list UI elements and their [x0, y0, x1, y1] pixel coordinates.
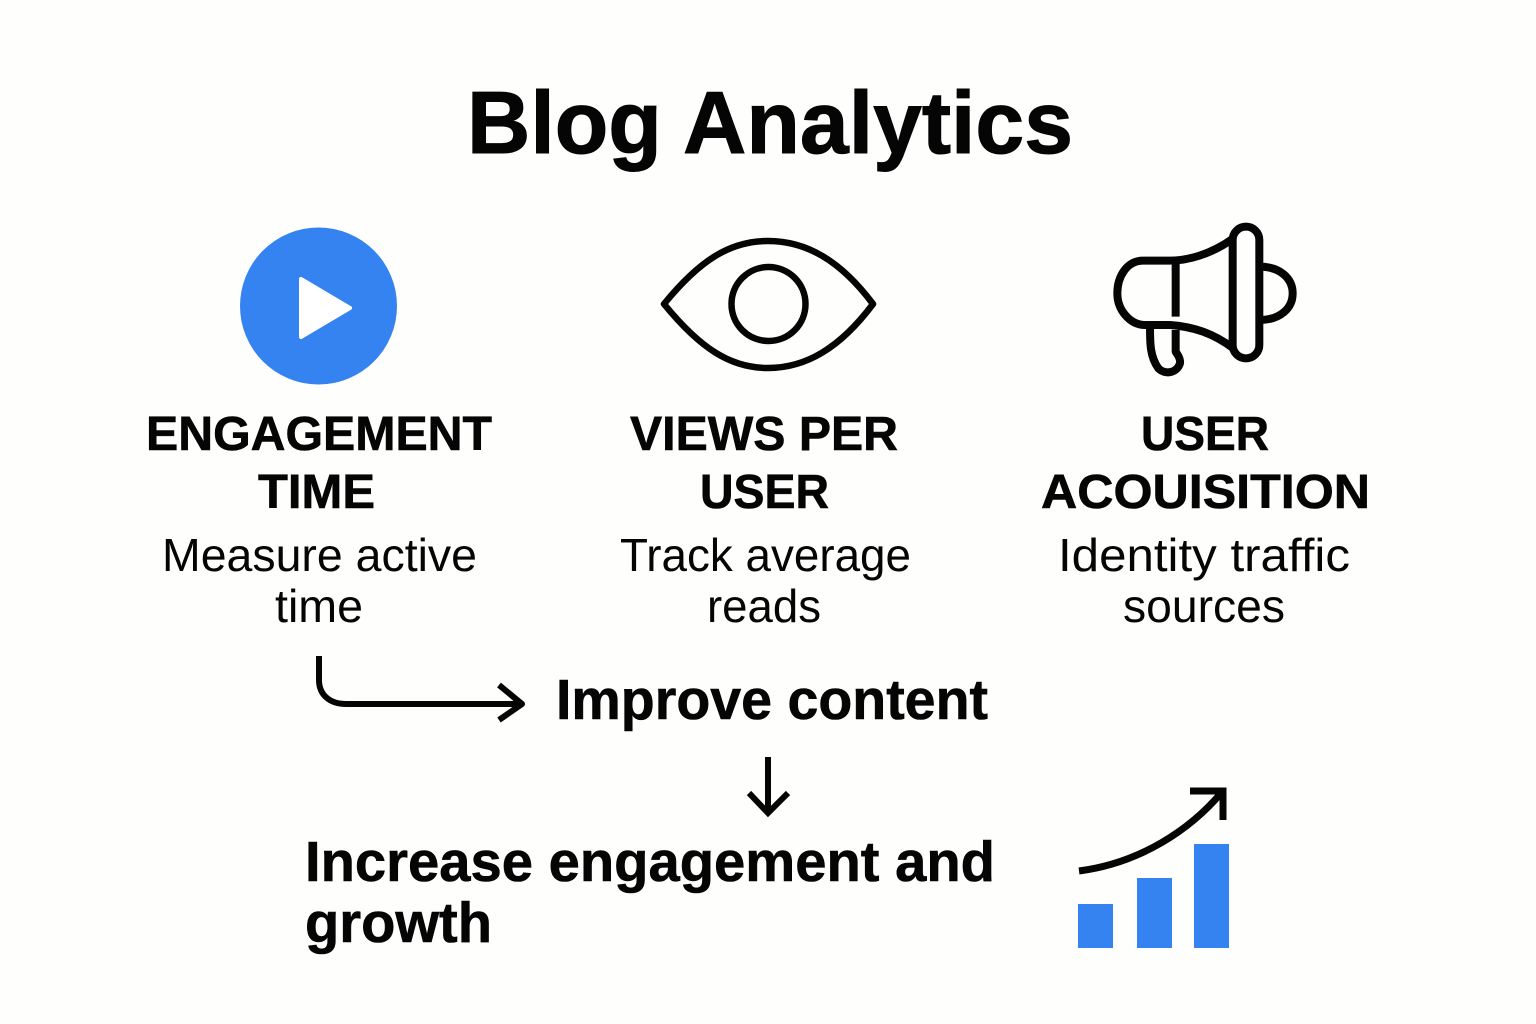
panel: user acquisition	[1041, 227, 1370, 632]
arrow: down	[749, 757, 788, 813]
heading: user acquisition	[1041, 408, 1370, 519]
icon: eye	[664, 241, 873, 368]
heading: engagement time: ENGAGEMENT	[146, 408, 492, 461]
title: Blog Analytics	[467, 73, 1073, 172]
heading: engagement time: TIME	[258, 466, 375, 519]
text: increase engagement and growth: Increase engagement and	[305, 830, 995, 894]
text: improve content: Improve content	[556, 668, 988, 732]
heading: user acquisition: ACOUISITION	[1041, 466, 1370, 519]
text: measure active time: Measure active	[162, 529, 477, 581]
chart: growth bars with arrow	[1078, 791, 1229, 948]
text: identity traffic sources: sources	[1123, 580, 1285, 632]
text: measure active time	[162, 529, 477, 632]
heading: views per user: VIEWS PER	[630, 408, 898, 461]
icon: play button	[240, 228, 397, 384]
arrow: engagement to improve content	[319, 656, 522, 720]
heading: views per user: USER	[700, 466, 829, 519]
heading: user acquisition: USER	[1141, 408, 1269, 461]
text: identity traffic sources	[1058, 529, 1350, 632]
text: increase engagement and growth	[305, 830, 995, 955]
heading: engagement time	[146, 408, 492, 519]
panel: views per user	[620, 241, 911, 632]
text: track average reads: Track average	[620, 529, 911, 581]
text: track average reads	[620, 529, 911, 632]
text: measure active time: time	[275, 580, 363, 632]
text: track average reads: reads	[707, 580, 821, 632]
icon: megaphone	[1117, 227, 1293, 372]
panel: engagement time	[146, 228, 492, 632]
text: identity traffic sources: Identity traffic	[1058, 529, 1350, 581]
heading: views per user	[630, 408, 898, 519]
text: increase engagement and growth: growth	[305, 891, 492, 955]
